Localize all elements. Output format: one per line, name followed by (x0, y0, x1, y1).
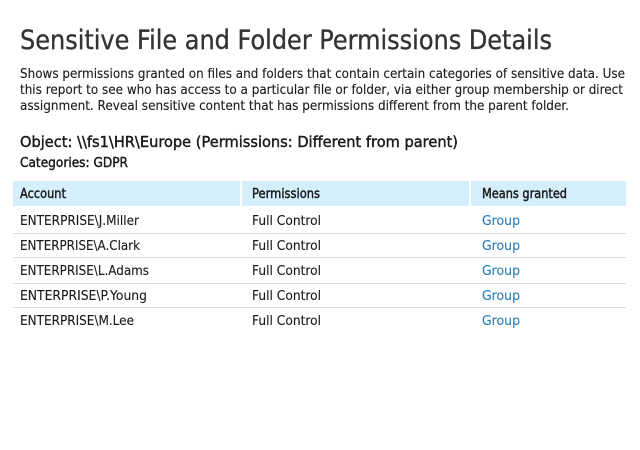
row: M.Lee: ENTERPRISE\M.Lee (20, 314, 134, 329)
row: J.Miller (20, 214, 520, 229)
table header row: Permissions (252, 187, 320, 202)
row: M.Lee (20, 314, 520, 329)
table header row (13, 181, 626, 206)
title: Sensitive File and Folder Permissions Details (20, 25, 552, 56)
description text block: assignment. Reveal sensitive content that has permissions different from the parent folder. (20, 99, 569, 114)
permissions table (13, 181, 626, 329)
row: L.Adams: Group (482, 264, 520, 279)
row: P.Young (20, 289, 520, 304)
row: P.Young: Full Control (252, 289, 321, 304)
object heading: Object: \\fs1\HR\Europe (Permissions: Different from parent) (20, 133, 458, 151)
row: A.Clark: Group (482, 239, 520, 254)
row: P.Young: ENTERPRISE\P.Young (20, 289, 147, 304)
row: A.Clark: Full Control (252, 239, 321, 254)
description text block (20, 67, 625, 114)
row: J.Miller: ENTERPRISE\J.Miller (20, 214, 140, 229)
row: L.Adams: Full Control (252, 264, 321, 279)
table header row: Means granted (482, 187, 567, 202)
row: A.Clark (20, 239, 520, 254)
row: J.Miller: Group (482, 214, 520, 229)
categories subheading: Categories: GDPR (20, 156, 128, 171)
row: L.Adams (20, 264, 520, 279)
row: M.Lee: Full Control (252, 314, 321, 329)
row: M.Lee: Group (482, 314, 520, 329)
row: L.Adams: ENTERPRISE\L.Adams (20, 264, 149, 279)
row: A.Clark: ENTERPRISE\A.Clark (20, 239, 140, 254)
table header row: Account (20, 187, 66, 202)
row: P.Young: Group (482, 289, 520, 304)
row: J.Miller: Full Control (252, 214, 321, 229)
